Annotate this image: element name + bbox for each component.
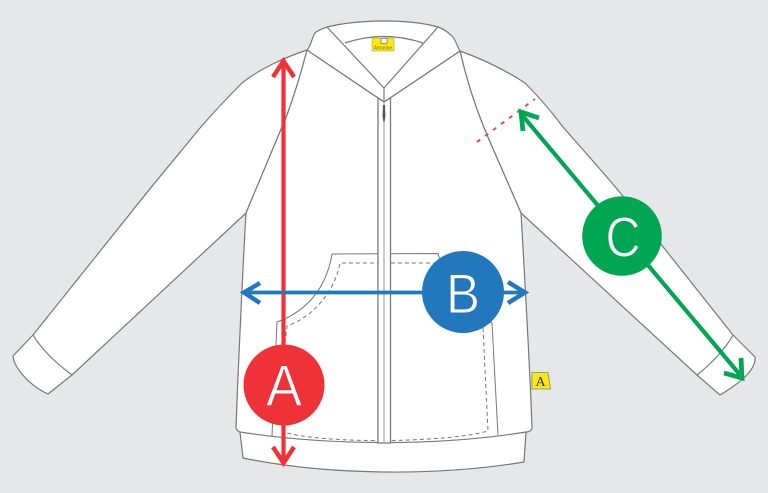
measurement guide: dashed red line (477, 99, 535, 142)
right cuff seam (697, 335, 733, 375)
zipper centre line (383, 102, 385, 443)
pocket outline (272, 254, 498, 436)
zipper placket (378, 98, 390, 443)
badge C (582, 196, 662, 276)
side label (532, 372, 550, 390)
hood lapel lines (327, 27, 438, 88)
badge A (244, 344, 324, 426)
side label: A (535, 375, 546, 390)
rib hem seam (240, 432, 526, 442)
arrow B: width (244, 282, 525, 303)
badge B: B (446, 262, 480, 325)
right sleeve (460, 51, 755, 395)
neck label: Amarine (374, 46, 393, 52)
neck label (372, 38, 394, 52)
badge A: A (266, 354, 302, 419)
pocket stitching (283, 263, 488, 441)
hood (307, 21, 460, 102)
left sleeve (13, 50, 307, 394)
badge C: C (606, 206, 640, 270)
left cuff seam (33, 335, 72, 375)
arrow A: length (273, 61, 294, 463)
badge B (422, 251, 504, 333)
inner collar curve (345, 36, 423, 43)
jacket body (236, 50, 532, 472)
arrow C: sleeve (521, 112, 742, 378)
centre neck seam (383, 88, 385, 102)
zipper pull (382, 105, 386, 122)
